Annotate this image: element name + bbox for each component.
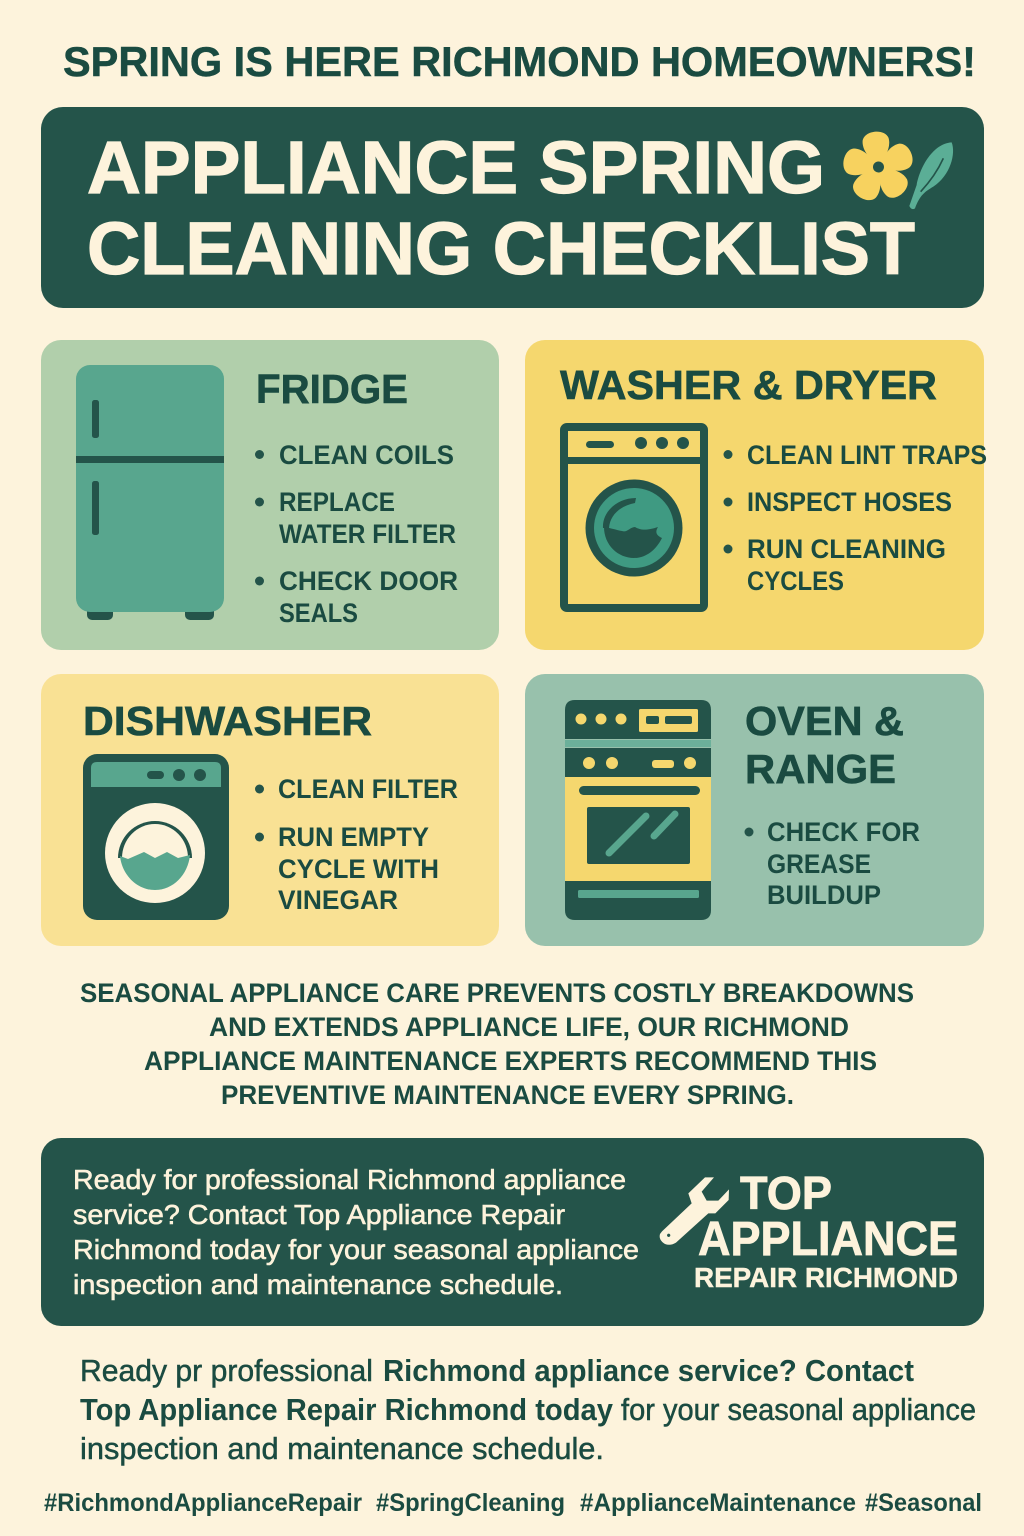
fridge checklist: SEALS xyxy=(279,598,358,628)
hashtags: #Seasonal xyxy=(865,1489,982,1517)
dishwasher heading: DISHWASHER xyxy=(83,698,372,744)
closing message: inspection and maintenance schedule. xyxy=(80,1431,604,1466)
seasonal care paragraph: SEASONAL APPLIANCE CARE PREVENTS COSTLY BREAKDOWNS xyxy=(80,978,914,1008)
hashtags xyxy=(44,1489,982,1517)
icon: oven xyxy=(565,700,711,920)
icon: wrench xyxy=(660,1177,729,1245)
closing message xyxy=(80,1353,976,1466)
washer checklist: INSPECT HOSES xyxy=(747,487,952,517)
title text: CLEANING CHECKLIST xyxy=(87,207,915,290)
closing message: Top Appliance Repair Richmond today xyxy=(80,1392,614,1427)
call to action text: Ready for professional Richmond appliance xyxy=(73,1164,626,1195)
dishwasher checklist: VINEGAR xyxy=(278,885,398,915)
logo: top appliance repair richmond: TOP xyxy=(740,1167,832,1219)
oven checklist: CHECK FOR xyxy=(767,817,920,847)
washer checklist: CLEAN LINT TRAPS xyxy=(747,440,987,470)
fridge checklist: CLEAN COILS xyxy=(279,440,454,470)
oven checklist: GREASE xyxy=(767,849,871,879)
icon: washing machine xyxy=(564,427,704,608)
seasonal care paragraph: PREVENTIVE MAINTENANCE EVERY SPRING. xyxy=(221,1080,794,1110)
panel: washer and dryer xyxy=(525,340,987,650)
dishwasher checklist xyxy=(255,774,458,915)
washer checklist: CYCLES xyxy=(747,566,844,596)
logo: top appliance repair richmond xyxy=(660,1167,958,1293)
title text xyxy=(87,126,915,290)
seasonal care paragraph xyxy=(80,978,914,1110)
washer checklist xyxy=(724,440,987,596)
oven heading xyxy=(745,698,904,792)
oven checklist xyxy=(744,817,920,910)
hashtags: #SpringCleaning xyxy=(376,1489,565,1517)
icon: leaf xyxy=(909,142,953,209)
hashtags: #ApplianceMaintenance xyxy=(580,1489,856,1517)
call to action banner xyxy=(41,1138,984,1326)
logo: top appliance repair richmond: APPLIANCE xyxy=(698,1213,958,1266)
seasonal care paragraph: APPLIANCE MAINTENANCE EXPERTS RECOMMEND THIS xyxy=(144,1046,877,1076)
oven heading: OVEN & xyxy=(745,698,904,744)
hashtags: #RichmondApplianceRepair xyxy=(44,1489,362,1517)
closing message: Ready pr professional xyxy=(80,1353,373,1388)
dishwasher checklist: CLEAN FILTER xyxy=(278,774,458,804)
washer checklist: RUN CLEANING xyxy=(747,534,946,564)
panel: fridge xyxy=(41,340,499,650)
fridge checklist: REPLACE xyxy=(279,487,395,517)
panel: dishwasher xyxy=(41,674,499,946)
fridge heading: FRIDGE xyxy=(256,366,408,412)
call to action text: Richmond today for your seasonal appliance xyxy=(73,1234,639,1265)
fridge checklist xyxy=(255,440,458,628)
dishwasher checklist: CYCLE WITH xyxy=(278,854,439,884)
closing message: Richmond appliance service? Contact xyxy=(383,1353,914,1388)
fridge checklist: WATER FILTER xyxy=(279,519,456,549)
call to action text: service? Contact Top Appliance Repair xyxy=(73,1199,565,1230)
icon: dishwasher xyxy=(83,754,229,920)
closing message: for your seasonal appliance xyxy=(621,1392,976,1427)
call to action text xyxy=(73,1164,639,1300)
washer heading: WASHER & DRYER xyxy=(560,362,937,408)
icon: fridge xyxy=(76,365,224,620)
seasonal care paragraph: AND EXTENDS APPLIANCE LIFE, OUR RICHMOND xyxy=(209,1012,849,1042)
panel: oven and range xyxy=(525,674,984,946)
oven heading: RANGE xyxy=(745,746,896,792)
eyebrow heading: SPRING IS HERE RICHMOND HOMEOWNERS! xyxy=(63,38,976,85)
dishwasher checklist: RUN EMPTY xyxy=(278,822,429,852)
fridge checklist: CHECK DOOR xyxy=(279,566,458,596)
icon: flower xyxy=(837,128,920,207)
oven checklist: BUILDUP xyxy=(767,880,881,910)
logo: top appliance repair richmond: REPAIR RICHMOND xyxy=(694,1262,958,1293)
call to action text: inspection and maintenance schedule. xyxy=(73,1269,563,1300)
title text: APPLIANCE SPRING xyxy=(87,126,825,209)
title banner xyxy=(41,107,984,308)
